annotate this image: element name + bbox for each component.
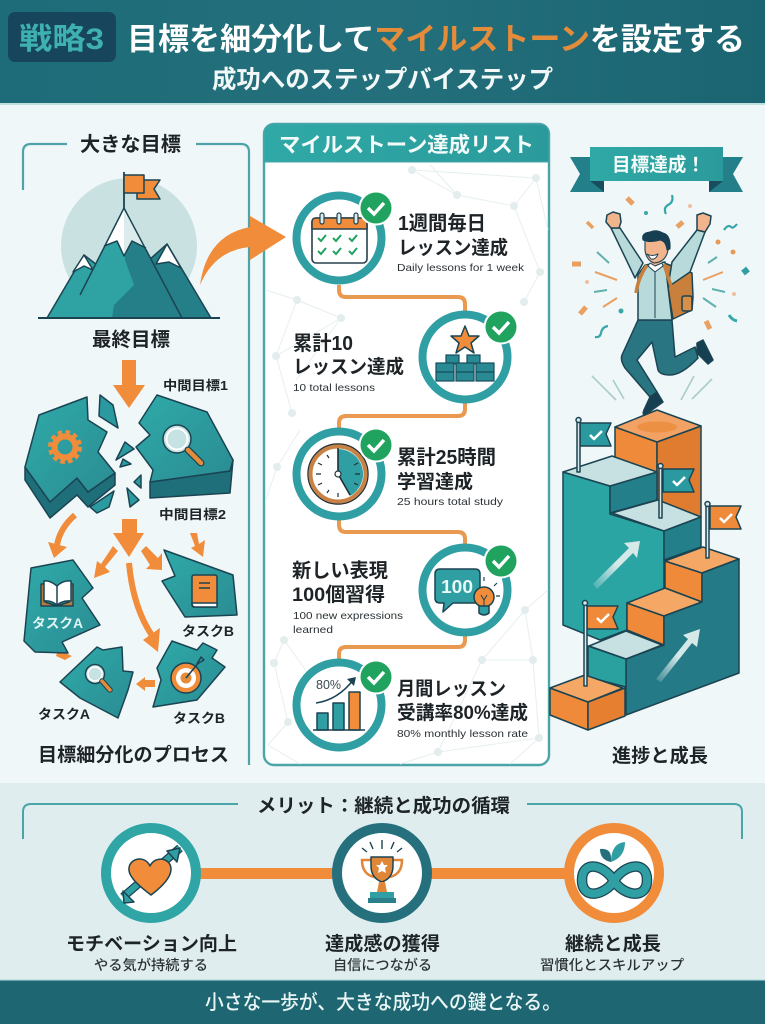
strategy badge: 戦略3 xyxy=(19,23,104,56)
strategy badge xyxy=(8,12,116,62)
text: milestone 4 xyxy=(292,559,403,636)
panel: benefits xyxy=(0,783,765,980)
text: milestone 5 xyxy=(397,679,528,740)
icon: infinity sprout xyxy=(569,828,659,918)
icon: star and bricks xyxy=(436,326,494,381)
text: milestone 5: 受講率80%達成 xyxy=(397,701,528,724)
text: milestone 4: learned xyxy=(293,624,333,636)
arrow: down to milestones xyxy=(113,360,145,408)
text: milestone 1: Daily lessons for 1 week xyxy=(397,262,525,274)
arrow: mountain to milestones xyxy=(200,216,286,285)
orange steps xyxy=(665,561,702,602)
title: 目標を細分化してマイルストーンを設定する xyxy=(127,22,745,57)
text: milestone 4: 新しい表現 xyxy=(292,559,388,582)
icon: shards xyxy=(90,395,141,513)
text: milestone 5: 80% monthly lesson rate xyxy=(397,728,528,740)
icon: calendar xyxy=(312,213,367,263)
task B top xyxy=(162,550,237,617)
sublabel: achievement: 自信につながる xyxy=(333,957,432,973)
benefit: achievement xyxy=(325,828,440,973)
icon: speech bubble and bulb xyxy=(435,569,500,615)
sublabel: continuation: 習慣化とスキルアップ xyxy=(540,957,684,973)
benefit: motivation xyxy=(66,828,237,973)
text: milestone 1: 1週間毎日 xyxy=(398,212,486,235)
label: task A: タスクA xyxy=(38,707,90,722)
icon: broken goal right with magnifier xyxy=(136,395,233,498)
illustration: stairs with flags xyxy=(550,410,741,730)
icon: check badge xyxy=(358,660,394,694)
benefit: continuation xyxy=(540,828,684,973)
heading: milestone list: マイルストーン達成リスト xyxy=(279,133,534,157)
text: milestone 3: 学習達成 xyxy=(397,470,473,493)
orange base box xyxy=(550,688,588,730)
text: milestone 3 xyxy=(397,446,504,508)
icon: broken goal left with gear xyxy=(25,397,115,518)
label: task B top: タスクB xyxy=(182,624,234,639)
icon: heart with arrow xyxy=(106,828,196,918)
illustration: jumping person xyxy=(606,212,713,415)
tall teal block xyxy=(563,472,664,640)
task A top: タスクA xyxy=(32,616,83,631)
icon: bar chart: 80% xyxy=(316,678,341,692)
header banner xyxy=(0,0,765,105)
text: milestone 2: 累計10 xyxy=(293,332,353,355)
label: achievement: 達成感の獲得 xyxy=(325,932,440,955)
text: milestone 2 xyxy=(293,332,404,394)
text: milestone 2: 10 total lessons xyxy=(293,382,375,394)
banner: goal achieved xyxy=(570,147,743,192)
milestone 4 xyxy=(292,544,518,636)
text: milestone 1 xyxy=(397,212,525,274)
text: milestone 4: 100個習得 xyxy=(292,584,385,606)
caption: progress and growth: 進捗と成長 xyxy=(612,744,708,767)
task B bottom xyxy=(153,641,225,707)
flags xyxy=(576,418,741,686)
arrows on stairs xyxy=(593,541,700,682)
panel: big goal xyxy=(23,133,249,766)
arrows: breakdown flow xyxy=(48,515,205,691)
confetti and motion lines xyxy=(572,195,748,400)
icon: clock xyxy=(308,444,368,504)
footer banner xyxy=(0,979,765,1024)
label: task B bottom: タスクB xyxy=(173,711,225,726)
sublabel: motivation: やる気が持続する xyxy=(94,957,208,973)
text: milestone 5: 月間レッスン xyxy=(397,679,506,700)
icon: mountain with flags xyxy=(38,172,220,318)
heading: big goal: 大きな目標 xyxy=(80,133,181,156)
icon: speech bubble and bulb: 100 xyxy=(441,577,473,597)
icon: trophy xyxy=(337,828,427,918)
text: milestone 3: 25 hours total study xyxy=(397,496,504,508)
icon: check badge xyxy=(484,544,518,578)
connector: milestone path xyxy=(339,285,465,660)
label: continuation: 継続と成長 xyxy=(565,932,661,955)
text: milestone 3: 累計25時間 xyxy=(397,446,496,469)
footer banner: 小さな一歩が、大きな成功への鍵となる。 xyxy=(205,991,561,1014)
icon: check badge xyxy=(484,310,518,344)
heading: milestone list xyxy=(264,124,549,162)
label: midpoint goal 1: 中間目標1 xyxy=(163,378,228,393)
panel: milestone list xyxy=(264,124,549,765)
subtitle: 成功へのステップバイステップ xyxy=(212,66,553,94)
icon: bar chart xyxy=(313,677,365,730)
milestone 1 xyxy=(296,190,525,280)
connector line xyxy=(200,868,565,879)
label: final goal: 最終目標 xyxy=(92,329,170,351)
task A bottom xyxy=(60,647,133,718)
label: motivation: モチベーション向上 xyxy=(66,933,237,955)
icon: check badge xyxy=(358,190,394,226)
caption: breakdown process: 目標細分化のプロセス xyxy=(38,744,229,766)
banner: goal achieved: 目標達成！ xyxy=(612,153,705,176)
label: midpoint goal 2: 中間目標2 xyxy=(159,507,226,522)
milestone 5 xyxy=(296,660,528,748)
text: milestone 4: 100 new expressions xyxy=(293,610,403,622)
icon: check badge xyxy=(358,428,394,462)
task A top xyxy=(24,560,100,653)
front dark block xyxy=(626,559,739,715)
top orange box xyxy=(615,427,657,490)
heading: benefits: メリット：継続と成功の循環 xyxy=(257,794,510,817)
text: milestone 2: レッスン達成 xyxy=(293,355,404,378)
milestone 3 xyxy=(296,428,504,516)
milestone 2 xyxy=(293,310,518,400)
text: milestone 1: レッスン達成 xyxy=(398,236,508,259)
